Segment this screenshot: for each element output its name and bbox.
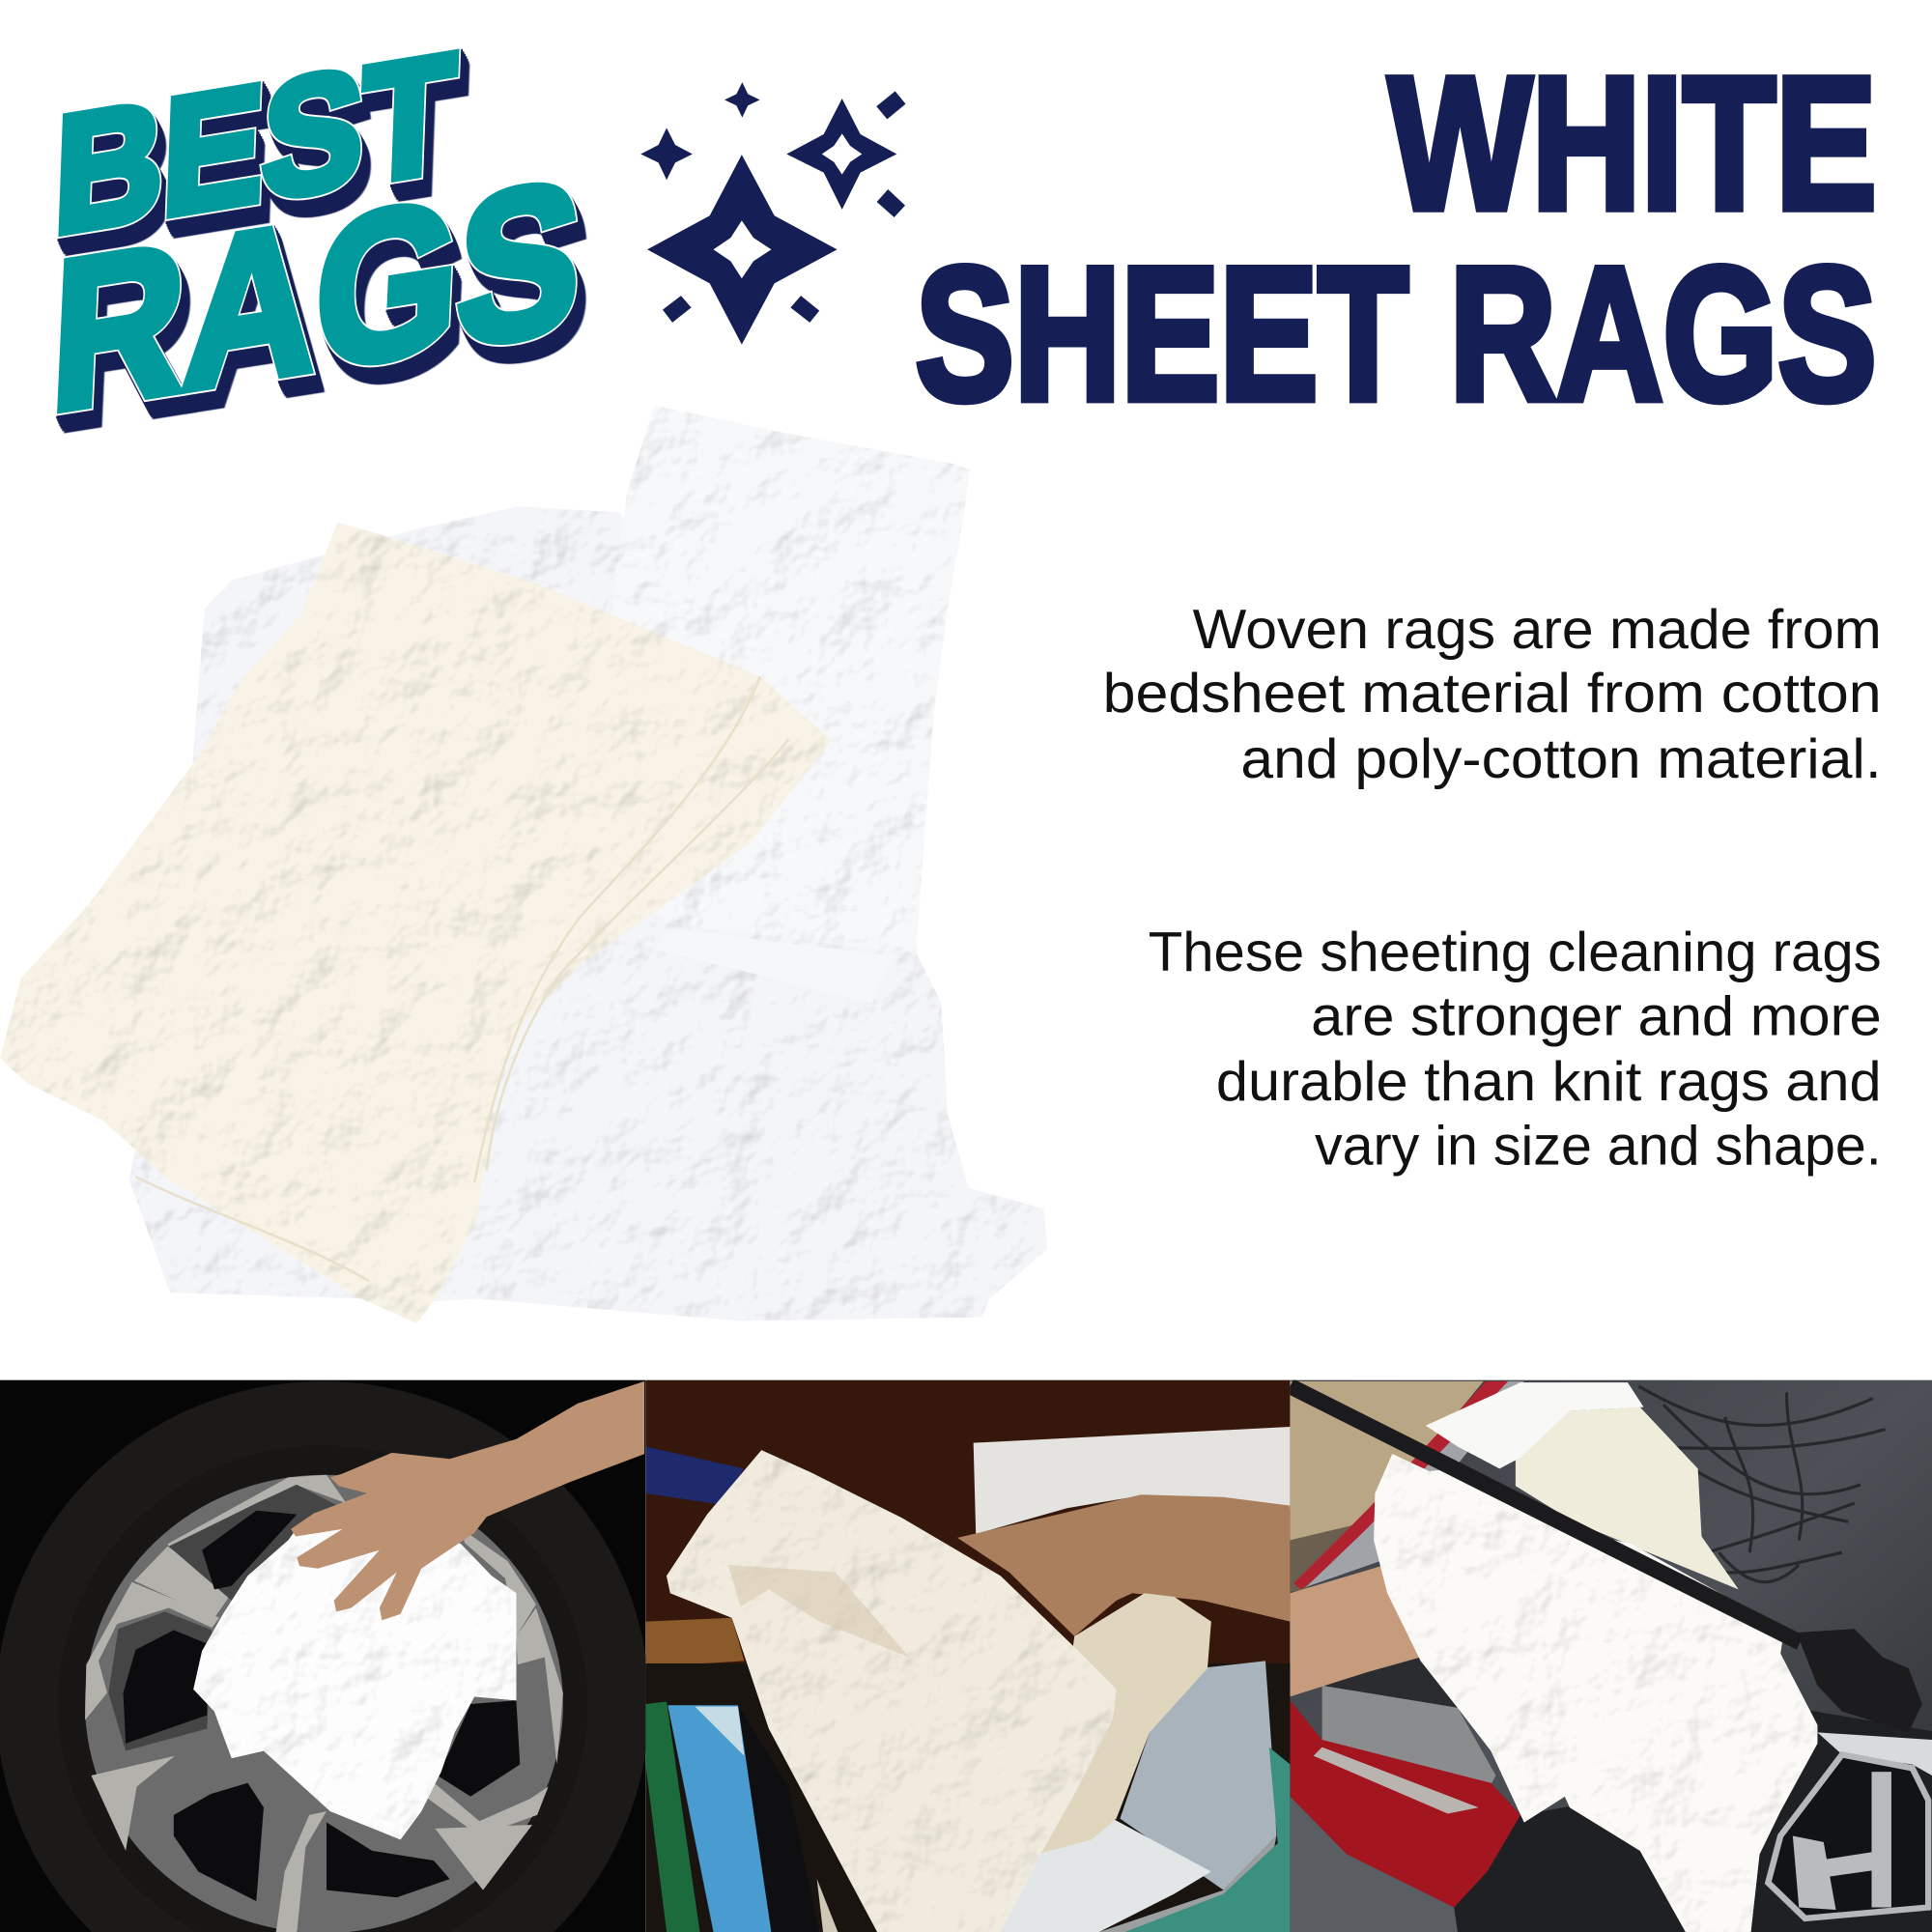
grey lower towel xyxy=(1099,1836,1276,1932)
wheel silver parts xyxy=(85,1475,563,1932)
icon: diamond lower right xyxy=(790,296,819,323)
tree reflection xyxy=(1638,1386,1886,1582)
rag: white folded sheet xyxy=(567,406,970,953)
logo: Best Rags xyxy=(47,19,585,455)
trunk chrome band xyxy=(1817,1732,1932,1776)
lower bumper xyxy=(1290,1797,1458,1932)
photo: wiping inside a shelf xyxy=(645,1380,1290,1932)
forearm xyxy=(957,1494,1290,1636)
wall background xyxy=(1290,1381,1484,1557)
icon: sparkles xyxy=(640,82,906,345)
rear window strip xyxy=(1306,1381,1524,1587)
wheel openings xyxy=(124,1511,520,1901)
back rag xyxy=(1516,1407,1739,1589)
paper roll xyxy=(974,1427,1290,1534)
blue handle xyxy=(645,1446,744,1504)
wheel window frames xyxy=(108,1485,343,1750)
green towel xyxy=(1125,1747,1290,1932)
main rag xyxy=(1374,1454,1817,1932)
icon: medium sparkle xyxy=(786,99,896,210)
arm and hand xyxy=(291,1381,644,1620)
text block: description 2 xyxy=(1149,922,1882,1177)
dark lower body xyxy=(1454,1700,1932,1932)
photo: wiping a car's rear xyxy=(1290,1380,1932,1932)
hand xyxy=(1290,1566,1421,1696)
wiper pivot xyxy=(1797,1629,1922,1732)
blue book xyxy=(668,1705,771,1932)
rag: cream fold lines xyxy=(135,676,788,1282)
title xyxy=(916,39,1877,440)
icon: large sparkle xyxy=(647,155,838,345)
product photo: pile of sheet rags xyxy=(0,406,1047,1323)
black book xyxy=(738,1705,819,1932)
cream book xyxy=(817,1879,838,1932)
text block: description 1: and poly-cotton material. xyxy=(1240,728,1882,790)
wheel rim xyxy=(85,1475,563,1932)
logo word: BEST: BEST xyxy=(52,19,458,269)
text block: description 2: are stronger and more xyxy=(1311,985,1882,1047)
red trim xyxy=(1293,1381,1508,1589)
tire xyxy=(0,1381,649,1932)
icon: diamond lower left xyxy=(663,296,692,323)
text block: description 2: durable than knit rags and xyxy=(1216,1051,1882,1113)
lower shelf xyxy=(645,1663,1290,1932)
icon: small sparkle top xyxy=(724,82,760,118)
text block: description 1: bedsheet material from cotton xyxy=(1103,663,1882,724)
rag stain xyxy=(728,1565,909,1658)
icon: diamond middle right xyxy=(877,189,905,217)
chrome trim xyxy=(1322,1686,1495,1807)
tail light clear band xyxy=(1314,1747,1479,1814)
upper rag xyxy=(1426,1382,1644,1468)
text block: description 1 xyxy=(1103,599,1882,790)
rag on wheel xyxy=(193,1502,516,1839)
honda badge xyxy=(1768,1754,1928,1918)
rag: folded hem xyxy=(653,929,894,1003)
tail light xyxy=(1290,1700,1520,1907)
grey towel xyxy=(1120,1661,1276,1890)
white towel xyxy=(997,1819,1211,1932)
inner rear shadow xyxy=(1322,1658,1458,1708)
photo: wiping a car wheel xyxy=(0,1380,649,1932)
text block: description 1: Woven rags are made from xyxy=(1193,599,1882,661)
icon: diamond top right xyxy=(876,91,906,119)
inner rag fold xyxy=(1037,1593,1211,1855)
green book xyxy=(645,1701,699,1932)
logo word: BEST: BEST xyxy=(52,19,458,269)
wiper arm xyxy=(1290,1386,1801,1642)
logo word: RAGS: RAGS xyxy=(47,135,585,455)
text block: description 2: These sheeting cleaning rags xyxy=(1149,922,1882,983)
rag: cream sheet xyxy=(0,523,832,1323)
logo word: RAGS: RAGS xyxy=(47,135,585,455)
text block: description 2: vary in size and shape. xyxy=(1315,1115,1882,1177)
gravel xyxy=(1290,1521,1368,1592)
icon: small sparkle left xyxy=(640,128,693,180)
rag: white bottom sheet xyxy=(129,506,1047,1321)
shelf board xyxy=(645,1618,744,1667)
stained rag xyxy=(667,1450,1117,1932)
